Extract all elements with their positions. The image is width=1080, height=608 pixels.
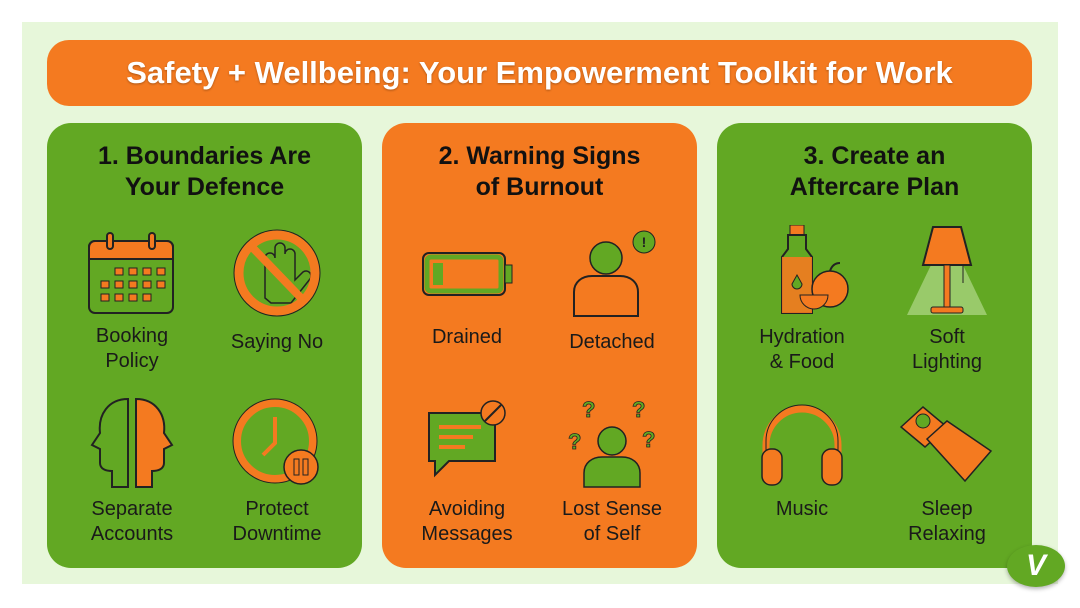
item: avoiding messages: [421, 400, 513, 545]
panel: boundaries: [47, 123, 362, 568]
item: drained: Drained: [432, 326, 502, 348]
heading: aftercare: 3. Create an: [804, 142, 945, 170]
item: booking policy: [88, 232, 174, 372]
logo badge: [1007, 545, 1065, 587]
item: hydration and food: Hydration: [759, 326, 845, 348]
item: saying no: Saying No: [231, 331, 323, 353]
heading: burnout: 2. Warning Signs: [439, 142, 640, 170]
logo badge: V: [1026, 549, 1046, 582]
item: drained: [422, 252, 512, 348]
item: booking policy: Booking: [96, 325, 168, 347]
item: protect downtime: Protect: [245, 498, 309, 520]
item: lost sense of self: of Self: [584, 523, 640, 545]
item: lost sense of self: Lost Sense: [562, 498, 662, 520]
item: detached: Detached: [569, 331, 655, 353]
heading: burnout: of Burnout: [476, 173, 603, 201]
item: separate accounts: Accounts: [91, 523, 173, 545]
item: lost sense of self: ?: [642, 427, 655, 452]
panel: aftercare: [717, 123, 1032, 568]
item: sleep relaxing: Relaxing: [908, 523, 986, 545]
title: Safety + Wellbeing: Your Empowerment Toolkit for Work: [126, 55, 953, 90]
item: lost sense of self: [562, 397, 662, 545]
item: avoiding messages: Messages: [421, 523, 513, 545]
item: lost sense of self: ?: [582, 397, 595, 422]
item: separate accounts: [90, 398, 174, 545]
heading: boundaries: [98, 142, 311, 201]
item: soft lighting: Soft: [929, 326, 965, 348]
heading: burnout: [439, 142, 640, 201]
item: hydration and food: & Food: [770, 351, 834, 373]
item: lost sense of self: ?: [568, 429, 581, 454]
heading: boundaries: 1. Boundaries Are: [98, 142, 311, 170]
heading: boundaries: Your Defence: [125, 173, 284, 201]
item: protect downtime: Downtime: [233, 523, 321, 545]
item: booking policy: Policy: [105, 350, 159, 372]
item: sleep relaxing: [900, 406, 992, 545]
item: soft lighting: [907, 226, 987, 373]
title: [47, 40, 1032, 106]
item: music: [761, 404, 843, 520]
heading: aftercare: [790, 142, 959, 201]
item: avoiding messages: Avoiding: [429, 498, 505, 520]
item: protect downtime: [232, 398, 321, 545]
item: soft lighting: Lighting: [912, 351, 982, 373]
panel: burnout: [382, 123, 697, 568]
item: detached: !: [642, 234, 646, 250]
item: detached: [569, 230, 656, 353]
item: lost sense of self: ?: [632, 397, 645, 422]
item: separate accounts: Separate: [91, 498, 173, 520]
item: saying no: [231, 230, 323, 353]
item: hydration and food: [759, 225, 849, 373]
heading: aftercare: Aftercare Plan: [790, 173, 959, 201]
item: sleep relaxing: Sleep: [921, 498, 973, 520]
item: music: Music: [776, 498, 828, 520]
